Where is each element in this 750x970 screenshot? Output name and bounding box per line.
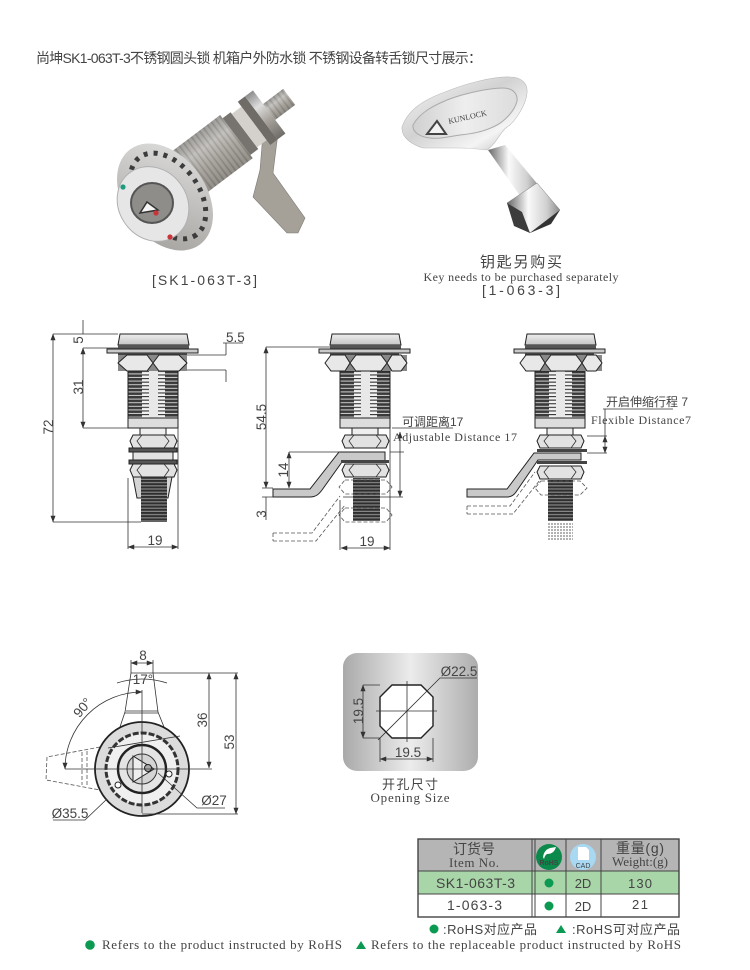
legend: chinese <box>430 922 680 937</box>
row: SK1-063T-3: SK1-063T-3 <box>436 875 515 891</box>
table: item numbers <box>418 839 679 917</box>
dimension: 5: 5 <box>71 336 86 344</box>
dashed spring end <box>548 524 573 539</box>
lock body <box>141 62 316 224</box>
key socket <box>507 183 560 233</box>
dimension: 72: 72 <box>41 419 56 435</box>
label: flexible distance <box>591 394 691 427</box>
row: 1-063-3: 21 <box>632 897 648 912</box>
dimension: 19: 19 <box>147 533 163 548</box>
header: item no <box>449 841 499 870</box>
dashed rotated handle <box>46 747 100 790</box>
dimension lines <box>587 409 673 453</box>
caption: opening size: Opening Size <box>370 790 450 805</box>
photo: key <box>402 77 560 233</box>
lock arm solid <box>273 452 385 497</box>
legend: chinese: :RoHS对应产品 <box>443 922 537 937</box>
icon: RoHS: RoHS <box>539 860 559 867</box>
dimension: 14: 14 <box>276 462 291 478</box>
caption: opening size: 开孔尺寸 <box>382 777 438 792</box>
dimension: 3: 3 <box>254 510 269 518</box>
key embossed text: KUNLOCK <box>447 108 488 126</box>
header: item no: 订货号 <box>453 841 495 857</box>
label: flexible distance: Flexible Distance7 <box>591 413 691 427</box>
row: SK1-063T-3: 2D <box>575 876 591 891</box>
label: adjustable distance: Adjustable Distance 17 <box>393 430 517 444</box>
key shaft <box>488 145 540 200</box>
icon: CAD <box>570 844 596 870</box>
legend: chinese: :RoHS可对应产品 <box>572 922 680 937</box>
header: item no: Item No. <box>449 855 499 870</box>
caption: key purchased separately: Key needs to be purchased separately <box>424 270 618 284</box>
drawing: side view with overall dimensions <box>41 320 245 549</box>
dimension: 8: 8 <box>139 648 147 663</box>
icon: RoHS <box>536 844 562 870</box>
header: weight: Weight:(g) <box>612 854 668 869</box>
caption: key purchased separately <box>424 254 618 298</box>
caption: key purchased separately: 钥匙另购买 <box>480 254 562 271</box>
dashed lower position <box>467 472 587 514</box>
caption: key purchased separately: [1-063-3] <box>482 282 560 298</box>
dimension lines <box>262 347 453 550</box>
row: 1-063-3 <box>447 897 648 914</box>
lock arm solid <box>467 453 581 497</box>
lock handle <box>253 133 305 233</box>
dashed lower position <box>273 480 392 541</box>
drawing: front view with handle <box>46 648 238 821</box>
dimension: 90 degrees: 90° <box>70 695 95 720</box>
row: SK1-063T-3: 130 <box>628 876 652 891</box>
row: SK1-063T-3 <box>436 875 652 891</box>
dimension lines <box>53 660 238 820</box>
dimension: 19: 19 <box>359 534 375 549</box>
threaded bolt <box>548 479 573 521</box>
dimension: 5.5: 5.5 <box>226 330 245 345</box>
dimension: 19.5 vertical: 19.5 <box>351 698 366 724</box>
dimension: 17 degrees: 17° <box>133 672 153 687</box>
drawing: flexible distance view <box>467 334 691 539</box>
threaded bolt <box>353 478 380 521</box>
dimension lines <box>363 678 477 762</box>
header: weight: 重量(g) <box>616 840 664 856</box>
dimension: diameter 27: Ø27 <box>201 793 227 808</box>
row: 1-063-3: 1-063-3 <box>447 897 502 913</box>
opening shape <box>380 685 433 738</box>
dimension: 36: 36 <box>195 712 210 728</box>
label: adjustable distance: 可调距离17 <box>402 414 464 429</box>
header: weight <box>612 840 668 869</box>
dimension: 31: 31 <box>71 379 86 395</box>
drawing: adjustable distance view <box>254 334 517 550</box>
icon: CAD: CAD <box>576 863 590 870</box>
dimension: 53: 53 <box>222 734 237 750</box>
dimension lines <box>53 320 243 549</box>
label: flexible distance: 开启伸缩行程 7 <box>606 394 688 409</box>
panel: opening size <box>343 653 478 771</box>
handle outline <box>120 673 164 727</box>
lock flange face <box>97 125 233 269</box>
row: 1-063-3: 2D <box>575 899 591 914</box>
label: adjustable distance <box>393 414 517 444</box>
dimension: 54.5: 54.5 <box>254 404 269 430</box>
key triangle mark <box>427 121 446 134</box>
indicator dots <box>120 184 173 240</box>
dimension: diameter 22.5: Ø22.5 <box>441 664 477 679</box>
dimension: 19.5 horizontal: 19.5 <box>395 745 421 760</box>
title: 尚坤SK1-063T-3不锈钢圆头锁 机箱户外防水锁 不锈钢设备转舌锁尺寸展示： <box>36 50 482 66</box>
photo: lock SK1-063T-3 <box>97 62 316 269</box>
dimension: diameter 35.5: Ø35.5 <box>52 806 88 821</box>
key handle <box>402 77 527 150</box>
caption: lock model: [SK1-063T-3] <box>152 272 257 288</box>
legend: english: Refers to the product instructed by RoHS <box>102 937 342 952</box>
legend: english: Refers to the replaceable product instructed by RoHS <box>371 937 681 952</box>
legend: english <box>85 937 681 952</box>
face circles <box>95 722 189 816</box>
caption: opening size <box>370 777 450 805</box>
